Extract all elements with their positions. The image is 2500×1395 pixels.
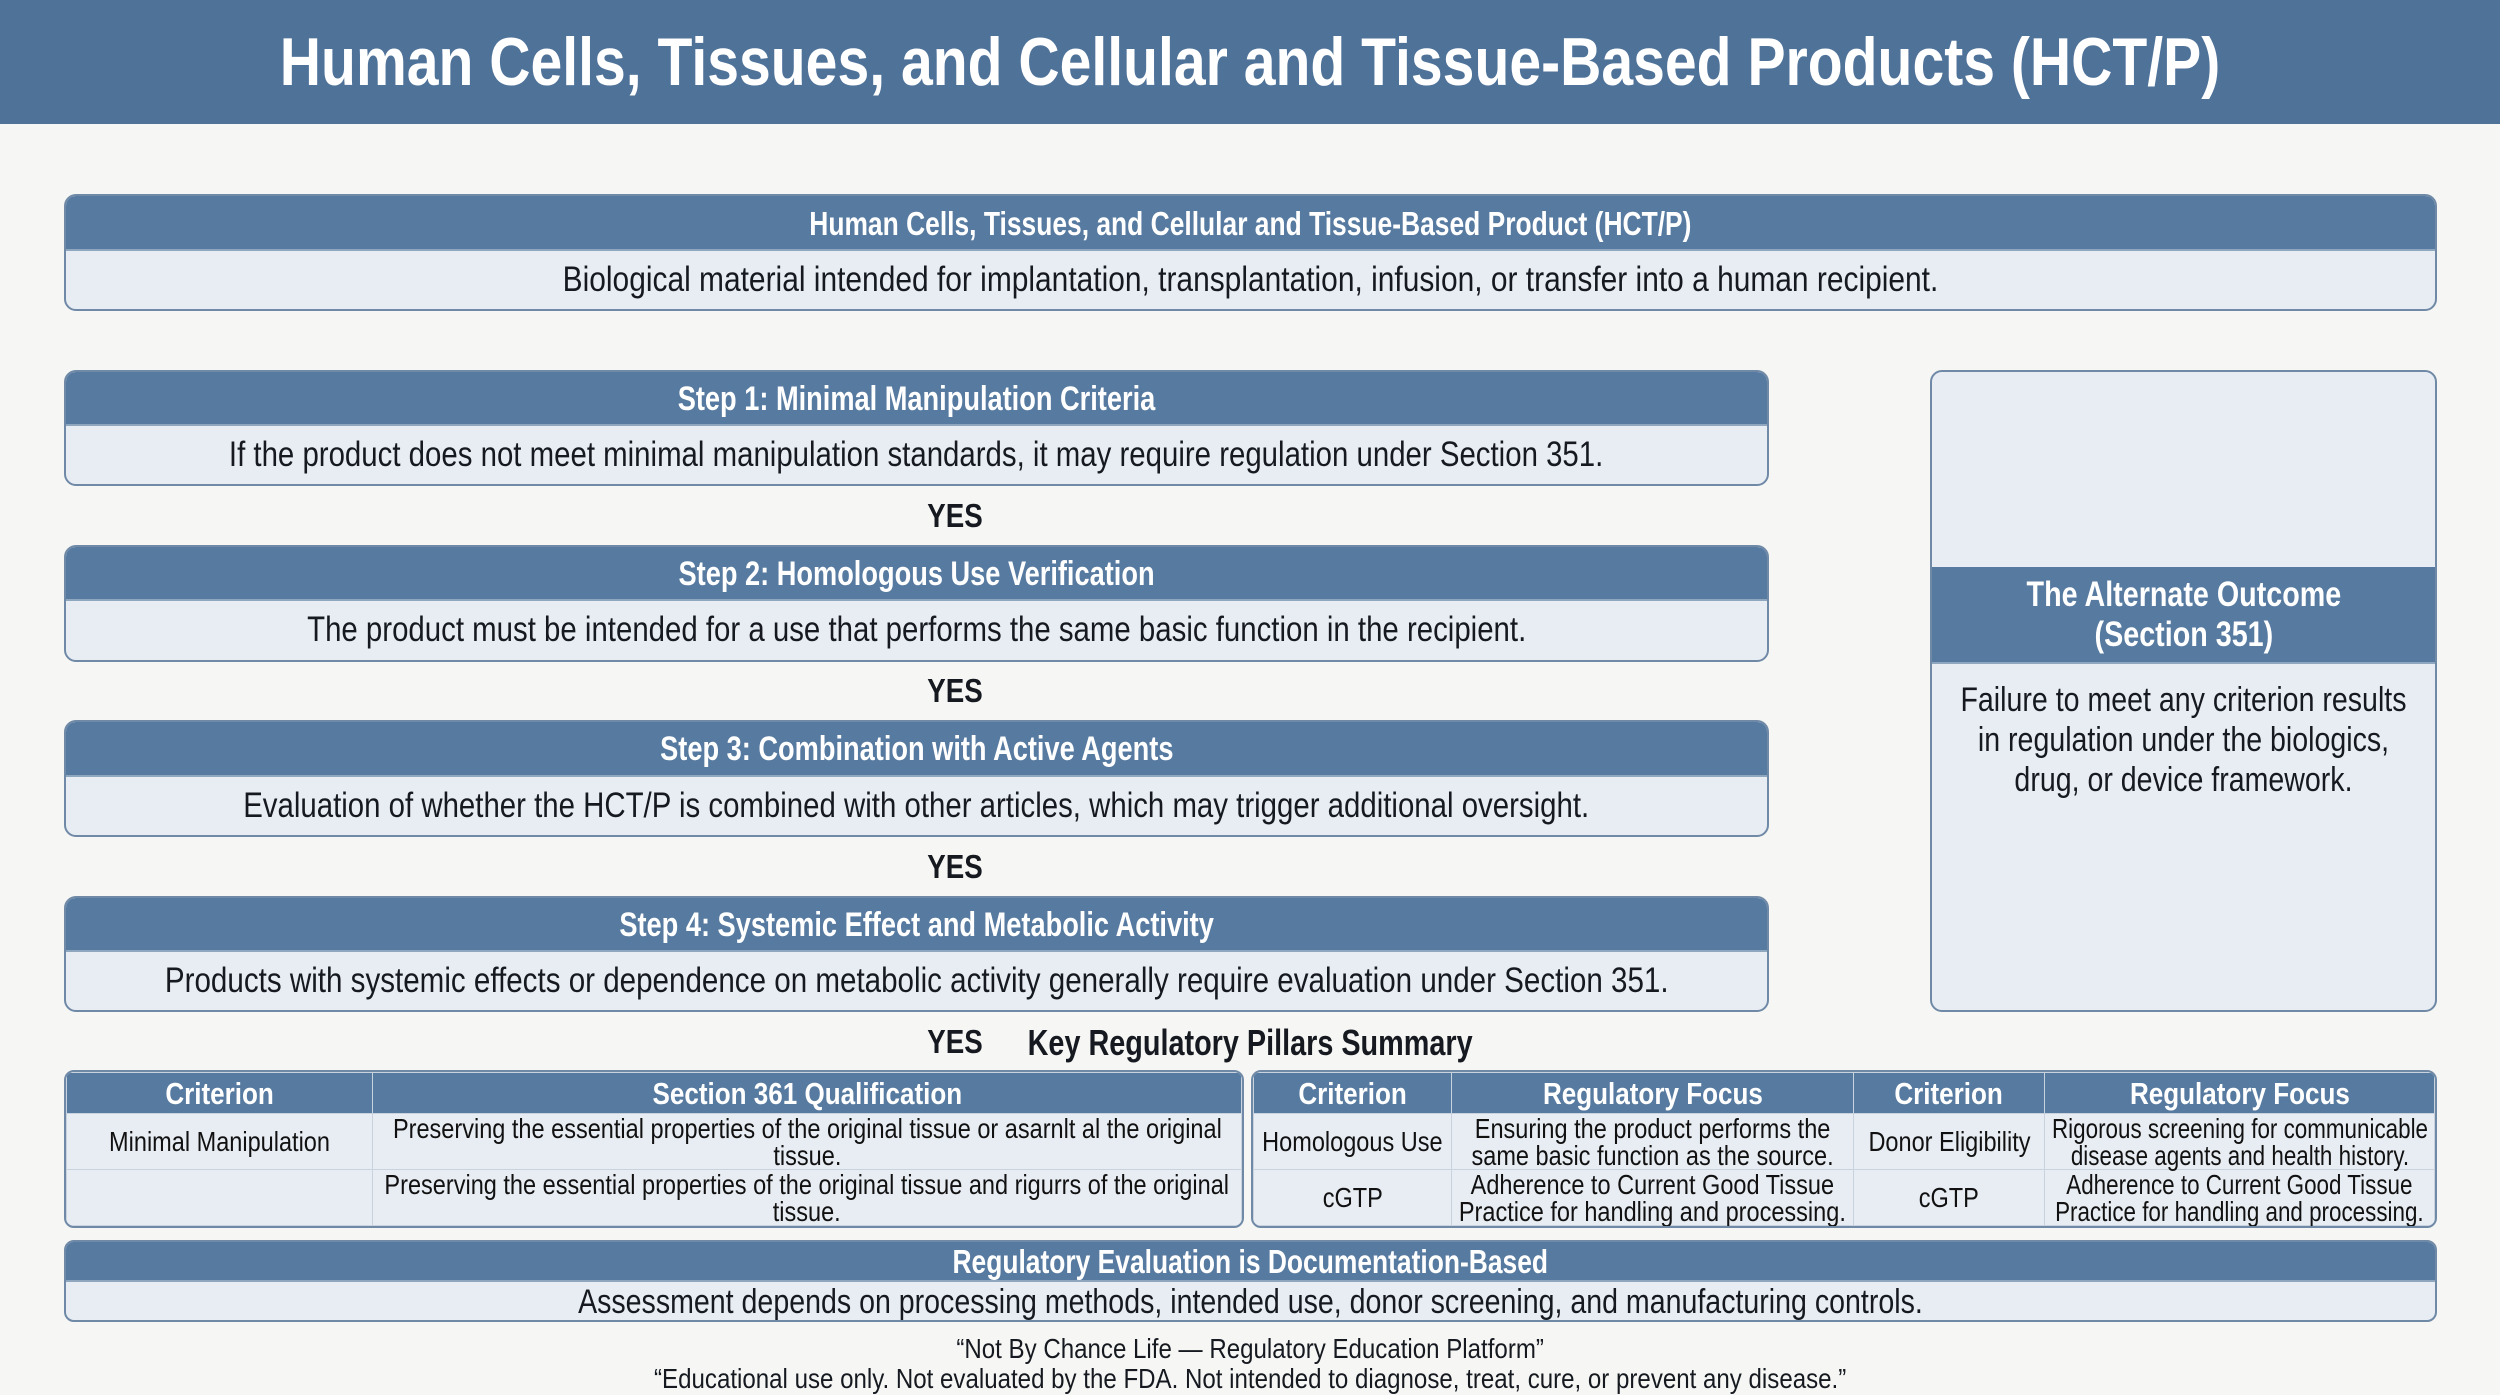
- alternate heading: The Alternate Outcome: [2026, 575, 2341, 614]
- step 4 heading: [66, 898, 1767, 952]
- summary heading: Key Regulatory Pillars Summary: [1028, 1022, 1473, 1063]
- step 1 panel: [64, 370, 1769, 486]
- footer: “Educational use only. Not evaluated by the FDA. Not intended to diagnose, treat, cure, or prevent any disease.”: [654, 1363, 1846, 1394]
- alternate text: [1960, 681, 2407, 799]
- table right: cGTP: [1322, 1182, 1383, 1213]
- documentation panel: [64, 1240, 2437, 1322]
- table right: Criterion: [1895, 1076, 2003, 1110]
- table right: Criterion: [1298, 1076, 1407, 1110]
- table left: Preserving the essential properties of the original tissue or asarnlt al the original: [393, 1112, 1221, 1144]
- alternate text: in regulation under the biologics,: [1978, 721, 2389, 759]
- table right: Adherence to Current Good Tissue: [2066, 1168, 2413, 1200]
- yes 1: YES: [927, 497, 983, 534]
- step 3 panel: [64, 720, 1769, 837]
- footer: [654, 1333, 1846, 1394]
- table left: Minimal Manipulation: [109, 1126, 330, 1157]
- title bar: [0, 0, 2500, 124]
- step 2 text: The product must be intended for a use that performs the same basic function in the recipient.: [307, 610, 1526, 649]
- step 2 heading: [66, 547, 1767, 601]
- table left: tissue.: [773, 1196, 841, 1226]
- table right: Ensuring the product performs the: [1475, 1112, 1830, 1144]
- step 3 text: Evaluation of whether the HCT/P is combined with other articles, which may trigger additional oversight.: [244, 786, 1589, 825]
- table left: Section 361 Qualification: [652, 1076, 962, 1110]
- table right: Practice for handling and processing.: [1459, 1196, 1846, 1226]
- step 1 heading: [66, 372, 1767, 426]
- table right: Homologous Use: [1262, 1126, 1443, 1157]
- step 2 heading: Step 2: Homologous Use Verification: [678, 555, 1155, 593]
- alternate outcome panel: [1930, 370, 2437, 1012]
- definition heading: [66, 196, 2435, 251]
- step 4 text: Products with systemic effects or dependence on metabolic activity generally require evaluation under Section 351.: [165, 961, 1668, 1000]
- table right: disease agents and health history.: [2070, 1140, 2409, 1170]
- step 3 heading: [66, 722, 1767, 777]
- table right: Rigorous screening for communicable: [2052, 1112, 2428, 1144]
- title bar: Human Cells, Tissues, and Cellular and Tissue-Based Products (HCT/P): [280, 24, 2220, 100]
- step 4 panel: [64, 896, 1769, 1012]
- table left: Preserving the essential properties of the original tissue and rigurrs of the original: [385, 1168, 1229, 1200]
- yes 3: YES: [927, 848, 983, 885]
- definition text: Biological material intended for implantation, transplantation, infusion, or transfer into a human recipient.: [563, 260, 1938, 299]
- alternate heading: (Section 351): [2094, 615, 2273, 654]
- yes 2: YES: [927, 672, 983, 709]
- definition heading: Human Cells, Tissues, and Cellular and Tissue-Based Product (HCT/P): [809, 205, 1692, 242]
- step 2 panel: [64, 545, 1769, 662]
- footer: “Not By Chance Life — Regulatory Education Platform”: [956, 1333, 1544, 1364]
- alternate text: Failure to meet any criterion results: [1960, 681, 2407, 719]
- table right: Regulatory Focus: [2130, 1076, 2349, 1110]
- table right: Donor Eligibility: [1868, 1126, 2030, 1157]
- alternate text: drug, or device framework.: [2014, 761, 2353, 799]
- table left: [64, 1070, 1244, 1228]
- table right: Regulatory Focus: [1543, 1076, 1762, 1110]
- definition panel: [64, 194, 2437, 311]
- table right: cGTP: [1919, 1182, 1979, 1213]
- step 3 heading: Step 3: Combination with Active Agents: [660, 730, 1173, 768]
- table right: Adherence to Current Good Tissue: [1471, 1168, 1834, 1200]
- documentation heading: [66, 1242, 2435, 1282]
- table left: Criterion: [165, 1076, 274, 1110]
- table right: same basic function as the source.: [1471, 1140, 1834, 1170]
- table right: Practice for handling and processing.: [2055, 1196, 2424, 1226]
- table right: [1251, 1070, 2437, 1228]
- step 1 heading: Step 1: Minimal Manipulation Criteria: [678, 380, 1155, 418]
- yes 4: YES: [927, 1023, 983, 1060]
- step 4 heading: Step 4: Systemic Effect and Metabolic Activity: [619, 906, 1214, 944]
- alternate heading: [1932, 567, 2435, 664]
- documentation heading: Regulatory Evaluation is Documentation-Based: [953, 1243, 1548, 1280]
- table left: tissue.: [773, 1140, 841, 1170]
- step 1 text: If the product does not meet minimal manipulation standards, it may require regulation under Section 351.: [229, 435, 1604, 474]
- documentation text: Assessment depends on processing methods, intended use, donor screening, and manufacturing controls.: [578, 1283, 1923, 1321]
